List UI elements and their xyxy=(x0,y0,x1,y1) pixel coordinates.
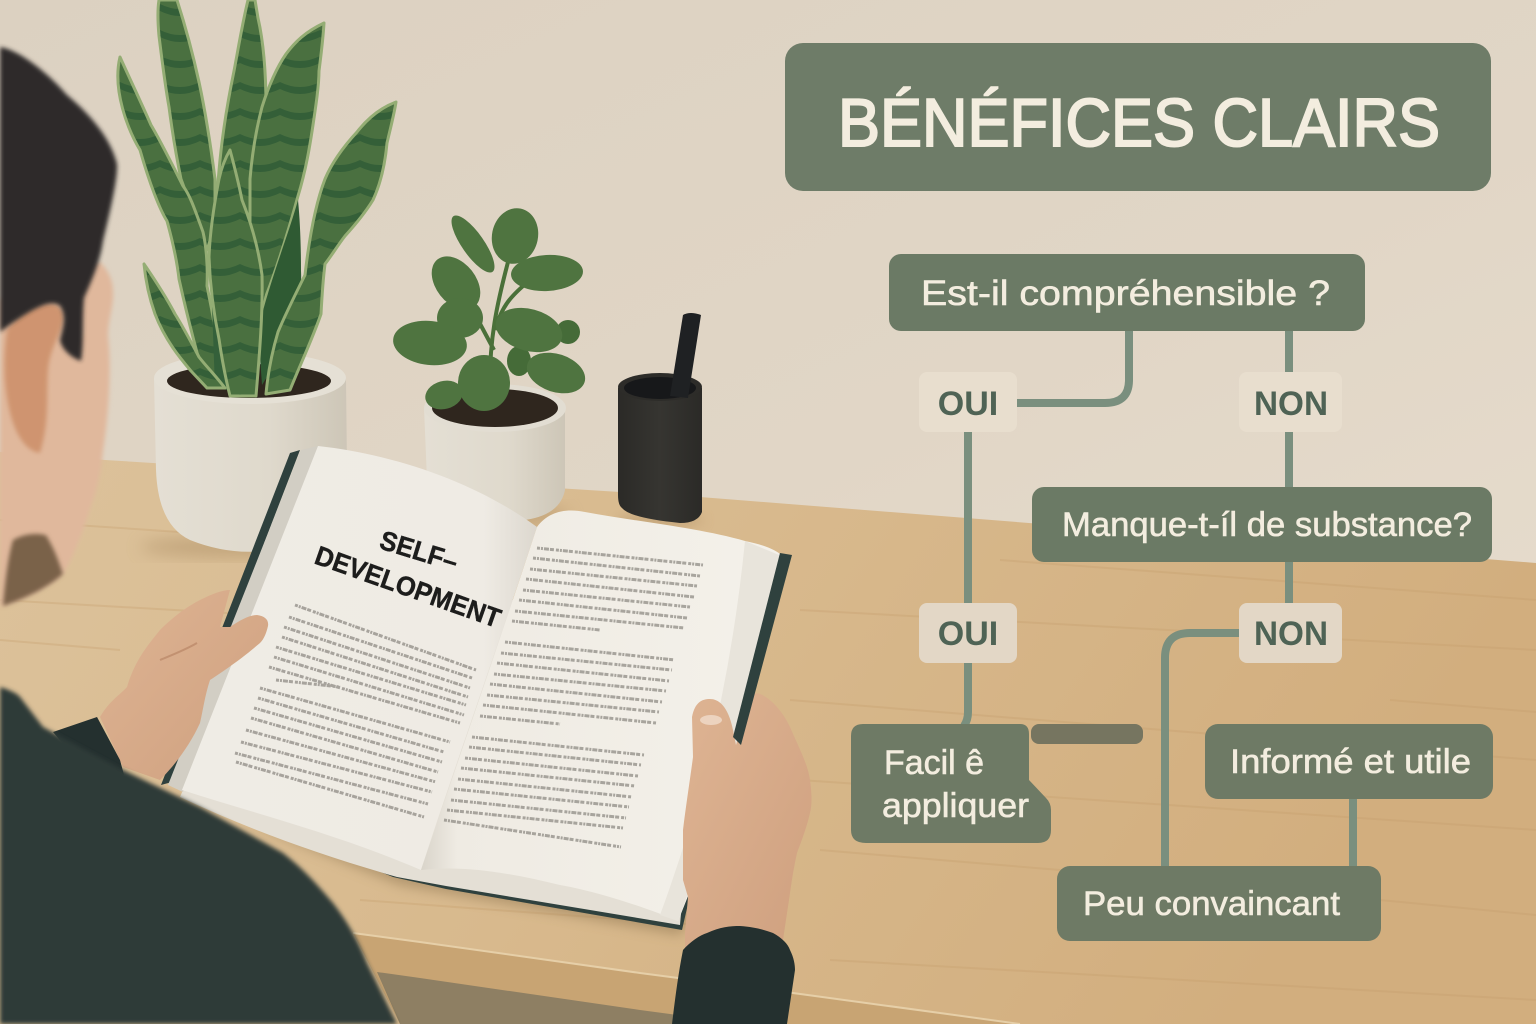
book shadow xyxy=(240,820,700,935)
right sweater cuff xyxy=(672,926,795,1024)
right page xyxy=(421,511,784,921)
wooden desk xyxy=(0,452,1536,1024)
ear xyxy=(5,304,63,453)
title banner xyxy=(785,43,1491,191)
floor under desk xyxy=(377,972,760,1024)
tag: OUI first xyxy=(919,372,1017,432)
question box: comprehensible xyxy=(889,254,1365,331)
snake plant leaves xyxy=(118,0,396,396)
left hand holding book xyxy=(100,590,268,780)
question box: comprehensible: Est-il compréhensible ? xyxy=(921,274,1330,313)
black pen holder xyxy=(616,313,704,526)
left page body text lines xyxy=(235,605,476,817)
outcome box: easy to apply: appliquer xyxy=(882,787,1029,825)
tag: NON first xyxy=(1239,372,1342,432)
hair xyxy=(0,47,117,361)
outcome box: easy to apply: Facil ê xyxy=(884,744,984,782)
left page xyxy=(182,446,537,870)
tag: NON second xyxy=(1239,603,1342,663)
large snake plant in pot xyxy=(118,0,396,557)
tag: OUI second: OUI xyxy=(938,615,998,653)
outcome box: not convincing xyxy=(1057,866,1381,941)
flowchart connectors xyxy=(964,331,1353,866)
open book xyxy=(161,446,784,935)
right page fore-edge xyxy=(660,541,784,921)
beard shadow xyxy=(3,534,63,606)
outcome box: informed and useful: Informé et utile xyxy=(1230,743,1471,781)
blank bar xyxy=(1031,724,1143,744)
book title on left page: DEVELOPMENT xyxy=(311,540,505,634)
book cover xyxy=(161,450,690,930)
tag: OUI second xyxy=(919,603,1017,663)
outcome box: easy to apply xyxy=(851,724,1051,843)
small pot xyxy=(420,384,570,525)
desk front face xyxy=(353,933,1020,1024)
right cover edge over fingers xyxy=(733,553,792,745)
outcome box: not convincing: Peu convaincant xyxy=(1083,885,1341,923)
tag: OUI first: OUI xyxy=(938,385,998,423)
right hand holding book xyxy=(683,553,812,950)
right page body text lines xyxy=(444,548,703,847)
face and neck skin xyxy=(0,262,113,606)
tag: NON second: NON xyxy=(1254,615,1328,653)
title banner: BÉNÉFICES CLAIRS xyxy=(838,85,1440,161)
small round-leaf plant in pot xyxy=(391,204,590,525)
page block xyxy=(168,446,700,925)
sweater torso xyxy=(0,687,397,1024)
book title on left page: SELF– xyxy=(376,525,462,577)
person from behind xyxy=(0,47,397,1024)
large pot xyxy=(140,352,347,557)
left sweater cuff xyxy=(53,717,124,775)
question box: substance xyxy=(1032,487,1492,562)
question box: substance: Manque-t-íl de substance? xyxy=(1062,506,1472,544)
outcome box: informed and useful xyxy=(1205,724,1493,799)
round leaves and stem xyxy=(391,204,590,413)
tag: NON first: NON xyxy=(1254,385,1328,423)
